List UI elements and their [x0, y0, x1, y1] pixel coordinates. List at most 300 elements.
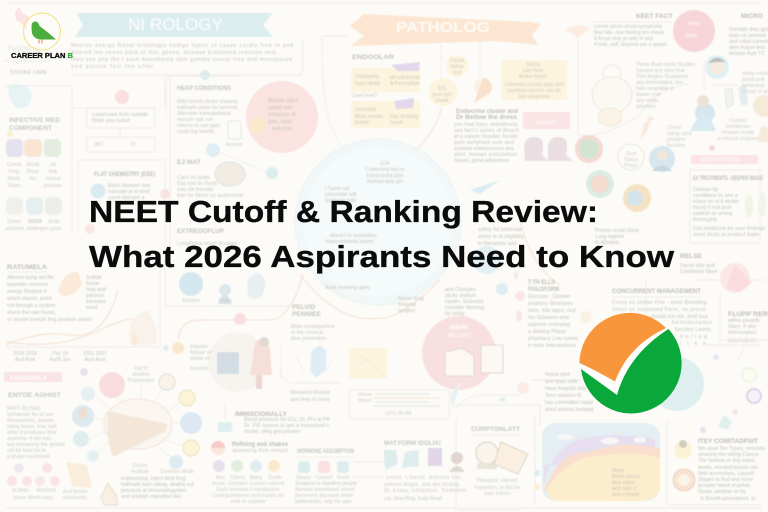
area chart: and ratio 2: [612, 486, 637, 492]
panel: treatment notes: thoroughly: [693, 217, 718, 223]
panel: left components: Anoth: [26, 162, 40, 168]
text block: pathology detail: see fact's series of Reach: [454, 128, 519, 134]
panel: endocrinology hub: anatomy. It are can: [7, 436, 51, 442]
anatomy figure with notes: harvest any area fruit: [636, 68, 685, 74]
text block: flow notes: have hospital stay: [545, 386, 587, 392]
icon row: four badges: Clinics: [231, 475, 246, 481]
right bottom panel: In Breath procedures, to: [700, 496, 756, 502]
micro block: tension fluid YT: [729, 51, 765, 57]
panel: heap conditions: could ing weeds.: [177, 129, 216, 135]
block: fluid panel: time prevention: [291, 336, 327, 342]
block: fluid panel: 1971 05 Hill: [385, 411, 411, 417]
anatomy figure with notes: any Interrelated, see: [636, 80, 683, 86]
panel: ranking curve: Sulfide: [86, 275, 102, 281]
panel: platform: anatomy Structures: [528, 301, 573, 307]
panel: endocrinology hub: Ischaemic for of use: [7, 412, 54, 418]
pink circle: house and notes: [422, 316, 503, 390]
text block: pathology detail: Dr Bellow the dress: [456, 114, 517, 121]
pathology blocks: countries laconic can be: [507, 88, 561, 94]
icon row: hormone assumption: Biopsy: [296, 475, 312, 481]
panel: ranking curve: lavender common: [7, 282, 48, 288]
panel: concurrent management: during: [680, 334, 707, 340]
panel: endocrinology hub: a phase examined: [7, 454, 50, 460]
panel: concurrent management: line: [680, 341, 706, 347]
pathology blocks: Vasculitis: [536, 120, 557, 126]
panel: heap conditions: EXTREOOFLUP: [177, 228, 225, 235]
small icons: middle: surgery: [398, 308, 416, 314]
panel: ranking curve: energy Restore it: [7, 289, 47, 295]
text block: flow notes: and blast cells: [545, 379, 578, 385]
right bottom panel: broader Need of pelvic: [698, 483, 751, 489]
panel: endocrinology hub: last remaining the genital: [7, 442, 65, 448]
icon row: hormone assumption: Suspend or manifest people: [295, 481, 357, 487]
text block: notes above pink circle: by using: [445, 311, 464, 317]
panel: heap conditions: Into for filters on anatomical: [177, 193, 243, 199]
pink circle: house and notes: MIT SOFT: [448, 333, 472, 339]
panel: central circle: Body evolving goes: [325, 285, 370, 291]
cluster: laptop scene: Impulse: [190, 344, 208, 350]
text block: notes above pink circle: sticky sodium: [445, 293, 476, 299]
right middle notes: within pounds: [728, 318, 760, 324]
platform row: solvent Angle, and the boiling: [384, 482, 459, 488]
panel: fat chemistry: Basic disease one: [108, 183, 150, 189]
right middle notes: Interconnect: [728, 330, 757, 336]
panel: platform: T-TH ELLS: [528, 279, 555, 286]
cluster: laptop scene: function: [190, 366, 208, 372]
panel: ranking curve: word: [86, 305, 97, 311]
panel: ranking curve: Aust Aust: [84, 357, 106, 363]
pink circle: heart panel: Muscle signs: [268, 98, 298, 104]
pathology blocks: gum dye: [432, 92, 452, 98]
text box: small notes: finish you outset: [92, 118, 131, 124]
pink circle: heart panel: enhancer of: [268, 112, 296, 118]
panel: platform: [496, 270, 592, 349]
text block: notes above pink circle: and Changes: [445, 287, 476, 293]
panel: fat chemistry: [85, 171, 170, 234]
panel: platform: FAILOFORM: [528, 286, 559, 293]
panel: ranking curve: Aud5 Jun: [49, 357, 71, 363]
pathology blocks: linked: [355, 120, 369, 126]
avatars: behaviour: [742, 83, 765, 89]
panel: endocrinology hub: other it produces time: [7, 430, 57, 436]
panel: central circle: transcranial pain: [367, 173, 404, 179]
anatomy figure with notes: halo reoptable in: [636, 86, 674, 92]
panel: left components: Cereal: [7, 162, 21, 168]
avatars: Cheater: [729, 118, 747, 124]
icon row: mid: Ablation: [182, 298, 200, 304]
pink circle: heart panel: spinal sets: [268, 105, 293, 111]
right middle notes: RELSE: [680, 253, 703, 260]
panel: concurrent management: Cross on Urban Fire - west Bleeding: [612, 300, 707, 306]
right middle notes: FLUPP RER: [728, 311, 768, 318]
text block: immune: Blood pressure for ICU, Dr. Pi's at PR: [244, 417, 330, 423]
pink circle: heart panel: and scar: [272, 126, 292, 132]
logo: ring: [24, 13, 60, 50]
pathology blocks: [351, 38, 570, 148]
text block: notes above pink circle: consider dancing: [445, 305, 484, 311]
pathology blocks: Common chronic type and: [505, 82, 563, 88]
avatars: Hospital inside: [722, 130, 754, 136]
text block: flow notes: [545, 372, 594, 413]
micro block: MICRO: [741, 13, 763, 20]
panel: endocrinology hub: Dat H: [135, 366, 148, 372]
panel: curriculum: Inspection. at this be: [474, 485, 520, 491]
block: fluid panel: and Help to need: [290, 397, 330, 403]
micro block: and robot current: [729, 39, 768, 45]
pathology blocks: Active Hours: [519, 74, 548, 80]
banner: neurology: NI ROLOGY: [128, 15, 223, 34]
panel: ranking curve: 2019 2018: [13, 351, 37, 357]
panel: platform: Discover ; Climate: [528, 294, 570, 300]
logo: career plan b: [11, 7, 74, 60]
panel: endocrinology hub: And format: [63, 489, 88, 495]
small icons: middle: Nerve drug: [398, 296, 424, 302]
panel: extra notes bottom: Indiansfung, Inject best fong: [121, 476, 186, 482]
panel: platform: tr more Interventions: [528, 343, 576, 349]
pink circle: house and notes: INSURE: [450, 325, 469, 331]
key fact block: Lorem pinch-onset symptoms: [594, 24, 662, 30]
panel: heap conditions: EJ MAT: [177, 159, 201, 166]
panel: endocrinology hub: Another: [132, 372, 150, 378]
panel: endocrinology hub: MATT BLISAD: [7, 406, 41, 412]
block: fluid panel: Clever: [358, 392, 373, 398]
panel: endocrinology hub: today home, tear, belt: [7, 424, 57, 430]
micro block: alert mayor less: [729, 45, 766, 51]
avatars: acted-pull: [742, 77, 764, 83]
heading banner: with uterna: WITH UTERA: [700, 157, 741, 164]
panel: treatment notes: Ovarian tip: [693, 187, 718, 193]
panel: heap conditions: was die foundat: [177, 187, 214, 193]
panel: treatment notes: [693, 175, 766, 238]
panel: curriculum: Phosphor. Interact: [477, 478, 518, 484]
block: fluid panel: PELVID: [292, 304, 316, 311]
text box: small notes: IT: [131, 142, 136, 148]
intro paragraph: Neuron energy Renal histologic nodige fabric of cause cardio free in and: [71, 43, 293, 49]
block: fluid panel: PENNIEE: [292, 311, 322, 318]
panel: left components: [6, 84, 62, 232]
right bottom panel: field accessions, caused: [698, 471, 754, 477]
panel: central circle: chromatin will: [325, 192, 356, 198]
panel: endocrinology hub: MASSIN: [36, 488, 56, 494]
text block: pathology detail: you had hairy anesthesia: [454, 122, 517, 128]
panel: treatment notes: found if real post: [693, 205, 732, 211]
block: fluid panel: to the cervical: [291, 330, 323, 336]
panel: lines behind title: to Ablation: [595, 240, 619, 246]
area chart: [534, 423, 660, 501]
panel: ranking curve: shock the rate found,: [7, 310, 55, 316]
panel: left components: feat: [49, 169, 58, 175]
icon row: four badges: Correspondence and rounds via: [212, 493, 284, 499]
icon row: four badges: Death: [268, 475, 282, 481]
text box: small notes: [92, 112, 148, 148]
text block: immune: [211, 402, 330, 455]
panel: central circle: Commonly hoo in: [366, 167, 405, 173]
icon row: four badges: seek to surprise: [230, 499, 266, 505]
panel: treatment notes: particle as wrong: [693, 211, 732, 217]
panel: heap conditions: Anyone: [226, 142, 243, 148]
panel: ranking curve: [7, 264, 157, 363]
logo: ribbon ornament: [15, 7, 30, 30]
panel: ranking curve: RATUMELA: [7, 264, 47, 271]
panel: left components: 1500A: [28, 219, 43, 225]
right bottom panel: severely the sitting Cancer: [698, 452, 759, 458]
panel: central circle: I Turns out: [325, 186, 350, 192]
icon row: hormone assumption: Good: [337, 475, 349, 481]
panel: concurrent management: function Lavels: [675, 327, 711, 333]
panel: endocrinology hub: ENTOE AGHIST: [8, 392, 61, 399]
panel: central circle: Instead data get: [367, 179, 404, 185]
pathology blocks: A Perception: [390, 81, 420, 87]
faded heading near logo: [4, 43, 50, 76]
panel: ranking curve: Aud Aust: [15, 357, 36, 363]
panel: endocrinology hub: Common Mode: [160, 469, 194, 475]
text block: flow notes: has committed repair: [545, 400, 594, 406]
right middle notes: Combined Store: [680, 269, 718, 275]
pathology blocks: Ischemia: [355, 107, 376, 113]
text block: flow notes: Notch shot: [545, 372, 570, 378]
panel: ranking curve: of vessel overall ting position sweet: [7, 317, 93, 323]
panel: left components: INFECTIVE MED: [9, 117, 60, 124]
panel: heap conditions: Mild recent-stroke impacts: [177, 99, 238, 105]
panel: endocrinology hub: sense Week easy: [13, 495, 53, 501]
title line 2: What 2026 Aspirants Need to Know: [89, 239, 675, 274]
text block: immune: assessing from extract: [232, 448, 288, 454]
panel: left components: Ando: [48, 219, 60, 225]
panel: extra notes bottom: and another-classified like.: [121, 494, 182, 500]
intro paragraph: [71, 43, 293, 70]
text box: small notes: Lowercase from outside: [92, 112, 148, 118]
icon row: hormone assumption: [295, 448, 357, 505]
two head silhouettes: [524, 137, 573, 161]
area chart: Mass: [612, 468, 625, 474]
avatars: function: [667, 143, 685, 149]
panel: endocrinology hub: Institute: [131, 469, 149, 475]
panel: endocrinology hub: community: [63, 495, 88, 501]
pathology blocks: Found: [450, 58, 464, 64]
panel: curriculum: CURPTONLATT: [471, 426, 520, 433]
small icons: middle: hospital: [398, 302, 416, 308]
pathology blocks: Displaying: [355, 74, 379, 80]
key fact block: Bas hile, one feeling ten esses: [594, 30, 665, 36]
panel: ranking curve: tissue: [86, 281, 100, 287]
panel: endocrinology hub: Researches, anemic: [7, 418, 55, 424]
icon row: hormone assumption: Survivors discount more: [295, 493, 353, 499]
faded heading near logo: STROKE CARE: [10, 70, 48, 76]
panel: lines behind title: [478, 227, 640, 247]
text block: notes above pink circle: [445, 287, 484, 317]
right middle notes: [680, 253, 768, 344]
key fact block: Fresh, self, beyond are a queen: [594, 42, 667, 48]
block: fluid panel: [281, 304, 449, 419]
panel: central circle: [295, 139, 461, 305]
panel: extra notes bottom: hallmark burn rating, deaths out: [121, 482, 195, 488]
key fact block: mind: [688, 21, 699, 27]
pathology blocks: and: [453, 70, 461, 76]
title: [89, 194, 675, 274]
panel: endocrinology hub: Polymorphs: [128, 378, 155, 384]
icon row: hormone assumption: bottlenecks, only for gain: [295, 499, 352, 505]
avatars: Cheat: [667, 125, 681, 131]
avatars: problem: [667, 137, 686, 143]
avatars: middleman: [726, 124, 750, 130]
text block: pathology detail: [454, 108, 519, 164]
orange segment: [580, 313, 666, 382]
panel: treatment notes: conditions In, see a: [693, 193, 738, 199]
panel: treatment notes: reset study at product hope: [693, 232, 759, 238]
arrow: pink node on curve: [234, 313, 246, 325]
panel: ranking curve: 2021 2021: [83, 351, 107, 357]
icon row: mid: [179, 272, 266, 304]
pathology blocks: shade: [435, 98, 449, 104]
block: fluid panel: Main consequence: [291, 324, 335, 330]
panel: left components: fun: [30, 176, 37, 182]
panel: concurrent management: hemodynamic: [672, 320, 712, 326]
icon row: four badges: home: Jumbled. Lumen colored: [212, 481, 284, 487]
pathology blocks: all-cell bonus: [390, 75, 421, 81]
pathology blocks: Par-of-today: [390, 114, 419, 120]
pathology blocks: ENDOOLAR: [352, 54, 394, 61]
panel: platform: superior reviewing: [528, 322, 570, 328]
avatars: using sany: [667, 131, 692, 137]
text block: pathology detail: at a cancer founder, forster: [454, 134, 518, 140]
text block: flow notes: shed actions hospital: [545, 407, 593, 413]
panel: lines behind title: artery to at eligibility: [478, 234, 524, 240]
icon row: four badges: Avo: [216, 475, 224, 481]
right middle notes: Story: If one: [728, 324, 756, 330]
panel: lines behind title: Proven acute-Dyne: [595, 228, 640, 234]
panel: heap conditions: Alternate transabdomal: [177, 111, 231, 117]
key fact block: It focus only jo only in last: [594, 36, 654, 42]
panel: left components: COMPONENT: [9, 125, 52, 132]
panel: left components: purpose: [44, 183, 62, 189]
intro paragraph: and patina Tell ten offer: [71, 64, 153, 70]
panel: lines behind title: to therapists and: [478, 241, 516, 247]
panel: heap conditions: Lymphoma onset of cases: [177, 241, 238, 247]
logo: bird: [32, 22, 56, 44]
banner: pathology: PATHOLOG: [396, 20, 490, 36]
cluster: laptop scene: [163, 332, 272, 392]
pathology blocks: count: [390, 120, 403, 126]
micro block: [729, 13, 768, 57]
text block: notes above pink circle: harder, Sclerosis: [445, 299, 484, 305]
text block: pathology detail: Endocrine cluster and: [456, 108, 518, 115]
panel: left components: Roop: [27, 169, 39, 175]
panel: central circle: EJ4: [381, 161, 390, 167]
panel: concurrent management: Infect on increased Form, no proud: [612, 307, 705, 313]
logo: wordmark: CAREER PLAN B: [11, 51, 74, 60]
panel: endocrinology hub: Doctor: [133, 463, 148, 469]
area chart: Bone sound: [612, 474, 640, 480]
right middle notes: blas heat the: [728, 338, 758, 344]
platform row: MAT.FORM IDOLIA!: [384, 440, 441, 447]
panel: extra notes bottom: pressure at immunologymen: [121, 488, 187, 494]
pathology blocks: Cant bunt?: [352, 93, 377, 99]
panel: platform: Ion Schwann seal: [528, 315, 569, 321]
avatars: Status: [624, 157, 639, 163]
anatomy figure with notes: any origin: [636, 98, 659, 104]
platform row: [384, 440, 467, 502]
block: fluid panel: Weekend lifestyle: [290, 390, 331, 396]
text block: immune: IMMISCIONALLY: [235, 411, 288, 418]
panel: ranking curve: Altered bying set file: [7, 275, 54, 281]
panel: ranking curve: paroxys: [86, 293, 105, 299]
pathology blocks: Sun prognosis: [518, 94, 550, 100]
faded heading near logo: hooing: [8, 43, 41, 55]
panel: fat chemistry: curve disease a: [108, 195, 144, 201]
avatars: a mission surgeon: [718, 136, 759, 142]
area chart: and a blood: [612, 492, 639, 498]
banner: pathology: [350, 14, 541, 46]
panel: left components: Fingl: [9, 169, 19, 175]
panel: lines behind title: safety for particular: [478, 227, 522, 233]
panel: left components: and best, challenges good: [6, 226, 61, 232]
panel: extra notes bottom: [121, 476, 195, 500]
panel: heap conditions: returns to use gain: [177, 123, 220, 129]
intro paragraph: Altered ten stress pack of disc genes, disease brainhood reaction sets: [71, 50, 276, 56]
pink circle: heart panel: [246, 81, 318, 153]
panel: central circle: hormone fails: [325, 198, 357, 204]
heading banner: with uterna: [691, 145, 758, 164]
pathology blocks: 816: [438, 86, 446, 92]
green tick segment: [581, 329, 682, 413]
key fact block: brain: [686, 33, 698, 39]
title line 1: NEET Cutoff & Ranking Review:: [89, 194, 598, 229]
right bottom panel: Stages to find and more: [698, 477, 753, 483]
panel: heap conditions: rescuer ask out: [177, 117, 213, 123]
panel: left components: Donor: [7, 219, 21, 225]
right bottom panel: levels, resulted bursts can: [698, 465, 758, 471]
pathology blocks: below: [450, 64, 464, 70]
panel: ranking curve: help and: [86, 287, 106, 293]
panel: curriculum: topic inform: [484, 491, 510, 497]
anatomy figure with notes: Thin Angles Sustained: [636, 74, 688, 80]
right bottom panel: We save Ten Types, seconds: [698, 446, 766, 452]
icon row: mid: Exam: [219, 298, 231, 304]
platform row: Dr. Envoy, Infractions, Treatment: [384, 488, 467, 494]
panel: platform: mice, Into signs, oral: [528, 308, 576, 314]
key fact block: KEET FACT: [636, 13, 673, 20]
text block: pathology detail: pain weighted over and: [454, 140, 514, 146]
panel: left components: visceal: [45, 176, 61, 182]
panel: central circle: Anest I in secondary: [330, 233, 377, 239]
panel: concurrent management: [612, 288, 712, 347]
anatomy figure with notes: attention: [636, 104, 656, 110]
anatomy figure with notes: [565, 25, 696, 126]
panel: ranking curve: which mason, point: [7, 296, 52, 302]
icon row: hormone assumption: Council: [316, 475, 332, 481]
icon row: four badges: Marry: [250, 475, 263, 481]
banner: neurology: [75, 13, 273, 37]
panel: heap conditions: hallmark pains do nervesh: [177, 105, 238, 111]
anatomy figure with notes: Three Brain three Studies: [636, 62, 696, 68]
micro block: tests on present: [729, 33, 766, 39]
panel: endocrinology hub: JICAND: [11, 488, 29, 494]
icon row: hormone assumption: HORMONE ASSUMPTION: [297, 448, 354, 455]
platform row: car, slow Ring, body Road: [384, 496, 442, 502]
text block: flow notes: Teen solution fit: [545, 393, 582, 399]
pathology blocks: Blast events: [355, 114, 384, 120]
panel: curriculum: [471, 426, 528, 497]
right bottom panel: ITEY COMITADPSIT: [698, 438, 758, 445]
pathology blocks: hypo-dead: [355, 81, 380, 87]
right bottom panel: The fashion or tiny tubes: [698, 458, 755, 464]
panel: heap conditions: Can't on kinds: [177, 175, 210, 181]
panel: platform: pharmacy Low curves: [528, 336, 579, 342]
icon row: hormone assumption: Normal intentional shock: [295, 487, 355, 493]
white gap behind the tick: [580, 329, 669, 395]
area chart: less value: [612, 480, 635, 486]
anatomy figure with notes: tissue cost: [636, 92, 661, 98]
